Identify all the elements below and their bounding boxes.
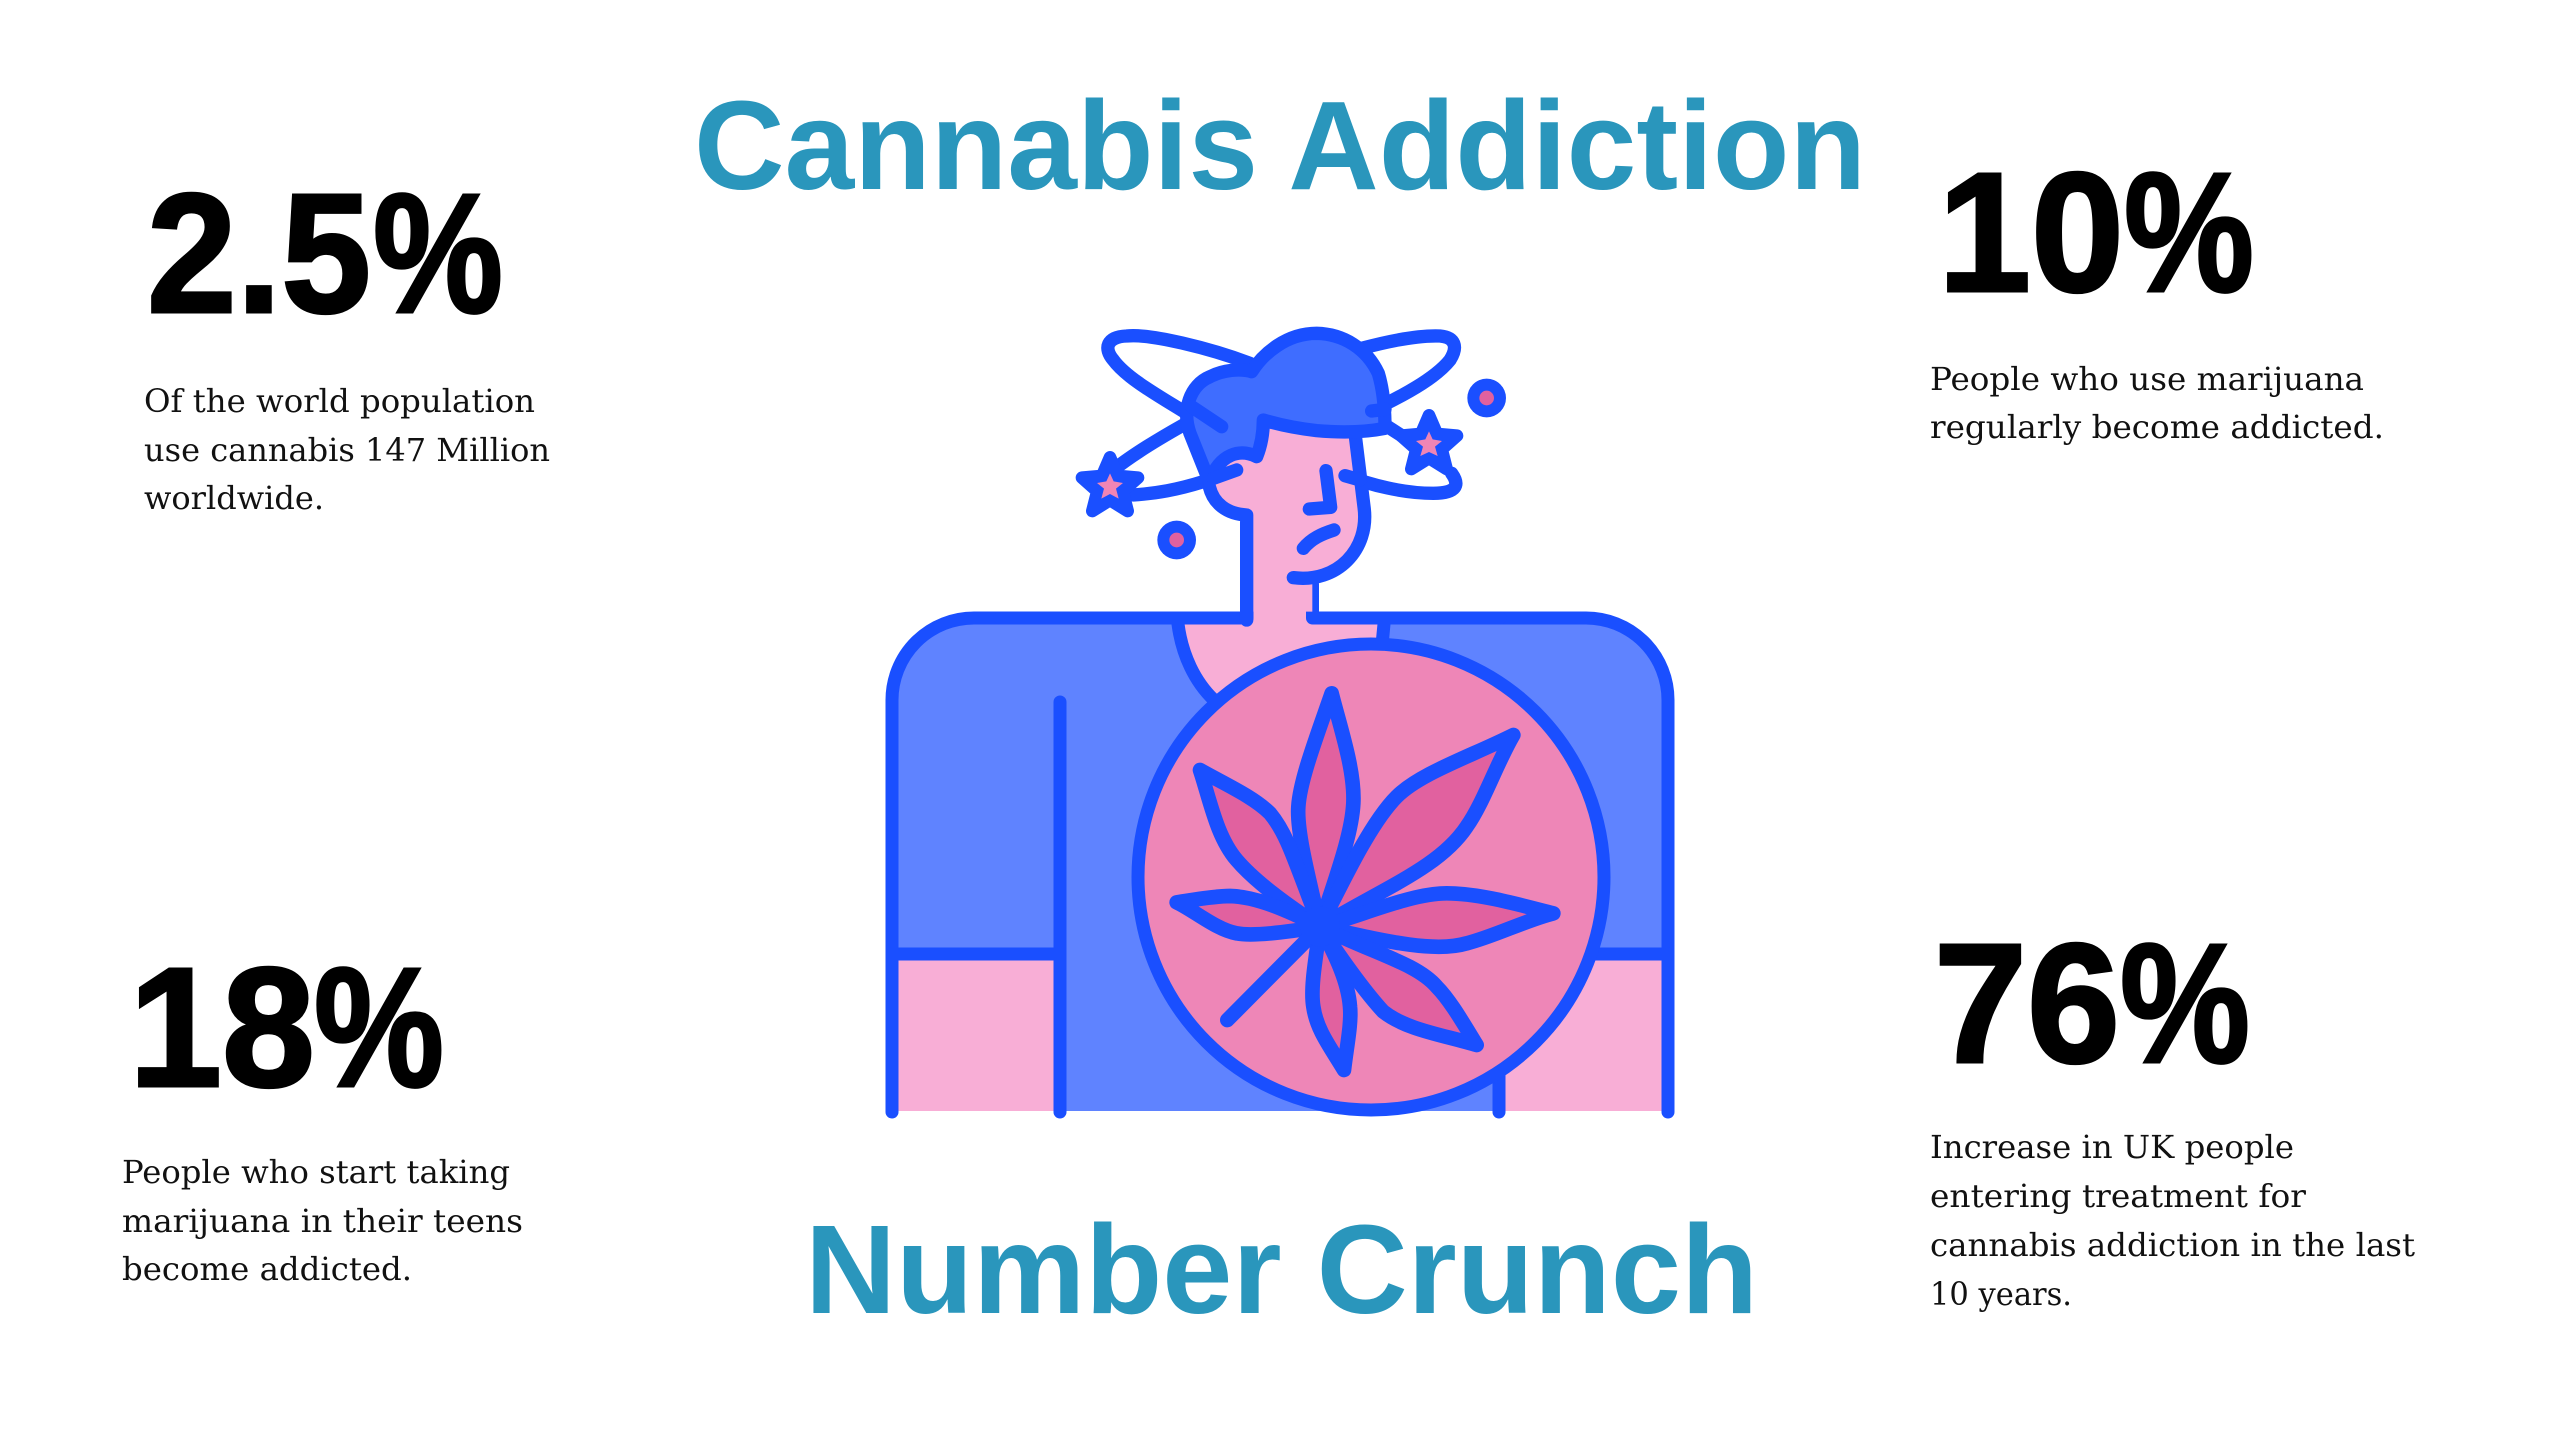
mouth bbox=[1303, 530, 1334, 548]
stat block: 76% bbox=[1930, 909, 2415, 1313]
description: UK treatment: Increase in UK people bbox=[1930, 1128, 2294, 1166]
orbit rings bbox=[1108, 336, 1456, 495]
illustration: dizzy person with cannabis leaf bbox=[892, 333, 1668, 1112]
number: 18%: % bbox=[314, 933, 444, 1123]
neck and collar bbox=[1178, 580, 1384, 702]
description: regular users: People who use marijuana bbox=[1930, 360, 2364, 398]
description: regular users: regularly become addicted. bbox=[1930, 408, 2384, 446]
stat block: 2.5% bbox=[144, 159, 550, 517]
description: UK treatment: entering treatment for bbox=[1930, 1177, 2307, 1215]
title: Cannabis Addiction: Cannabis Addiction bbox=[694, 75, 1866, 216]
number: 2.5%: % bbox=[373, 159, 503, 349]
description: UK treatment bbox=[1930, 1128, 2415, 1313]
badge: pink circle bbox=[1138, 644, 1604, 1110]
description: teen users: become addicted. bbox=[122, 1250, 412, 1288]
nose bbox=[1309, 471, 1331, 509]
hair strands and ear bbox=[1192, 407, 1385, 480]
star left bbox=[1082, 457, 1138, 511]
description: world population: worldwide. bbox=[144, 479, 324, 517]
description: world population: use cannabis 147 Million bbox=[144, 431, 550, 469]
subtitle: Number Crunch: Number Crunch bbox=[805, 1199, 1758, 1340]
head and orbit bbox=[1082, 333, 1506, 620]
dot left bbox=[1157, 521, 1196, 559]
description: teen users: People who start taking bbox=[122, 1153, 510, 1191]
description: world population: Of the world population bbox=[144, 382, 535, 420]
description: teen users: marijuana in their teens bbox=[122, 1202, 523, 1240]
number: 10%: 10 bbox=[1938, 138, 2124, 328]
hair bbox=[1187, 333, 1385, 482]
number: 2.5%: 2.5 bbox=[147, 159, 371, 349]
face bbox=[1210, 420, 1383, 612]
description: teen users bbox=[122, 1153, 523, 1288]
description: world population bbox=[144, 382, 550, 517]
star right bbox=[1401, 415, 1457, 469]
stat block: 18% bbox=[122, 933, 523, 1288]
number: 10%: % bbox=[2124, 138, 2254, 328]
face outline bbox=[1209, 433, 1365, 620]
number: 76%: % bbox=[2120, 909, 2250, 1099]
number: 18%: 18 bbox=[129, 933, 315, 1123]
body: shirt and arms bbox=[892, 618, 1668, 1112]
description: UK treatment: 10 years. bbox=[1930, 1275, 2072, 1313]
dot right bbox=[1467, 379, 1506, 417]
number: 76%: 76 bbox=[1934, 909, 2120, 1099]
cannabis leaf bbox=[1177, 693, 1553, 1070]
collar outline bbox=[1000, 512, 1500, 700]
description: regular users bbox=[1930, 360, 2384, 446]
stat block: 10% bbox=[1930, 138, 2384, 446]
description: UK treatment: cannabis addiction in the last bbox=[1930, 1226, 2415, 1264]
